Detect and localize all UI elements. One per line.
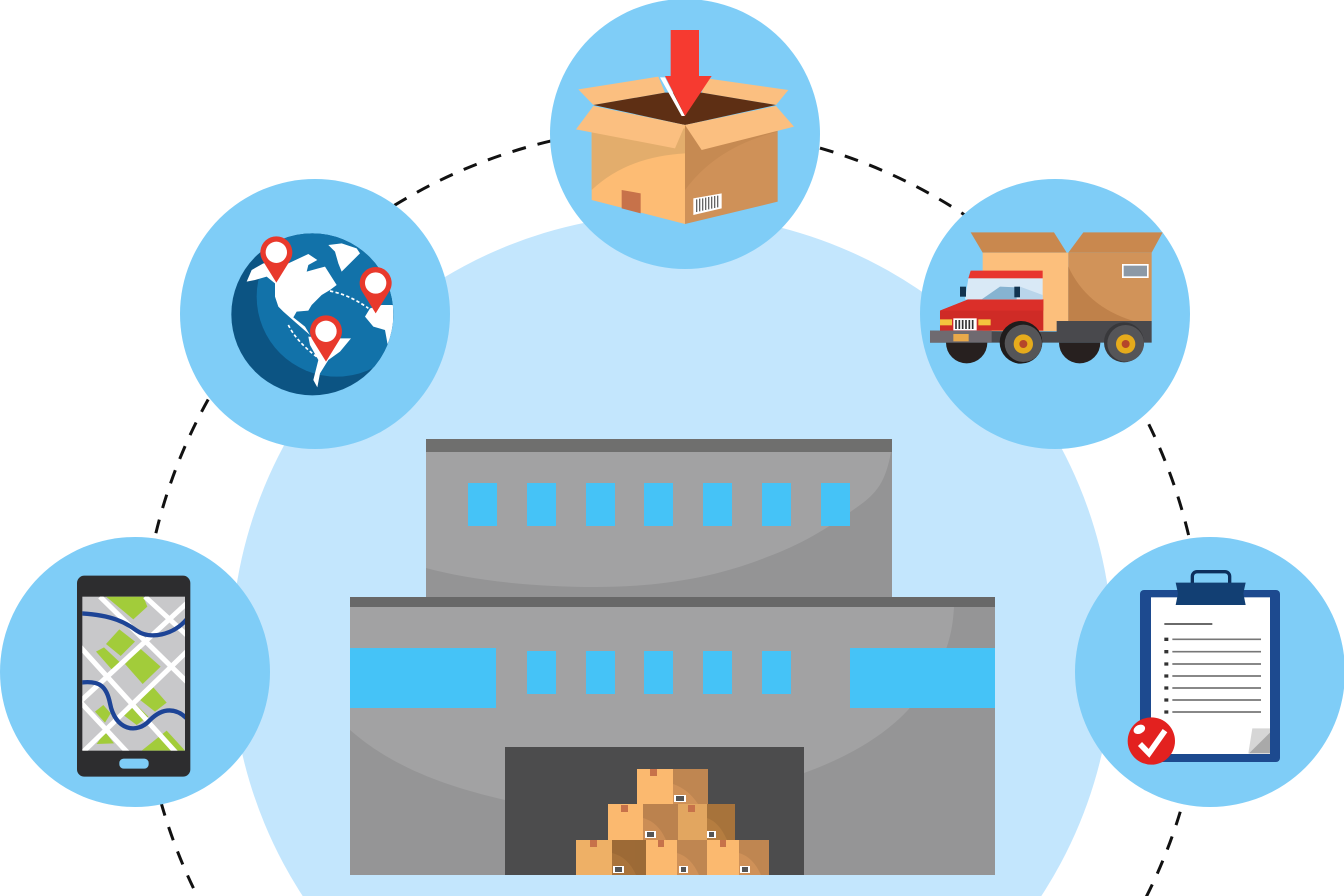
- wheels: [946, 343, 987, 363]
- rivers: [80, 613, 187, 728]
- lower storey: [350, 597, 995, 875]
- node: mobile map tracking: [0, 537, 270, 807]
- dashed cycle path: [141, 127, 1203, 896]
- node: order checklist: [1075, 537, 1344, 807]
- map pins: [260, 236, 392, 362]
- stacked boxes: [576, 769, 769, 875]
- continents: [247, 254, 337, 335]
- icon: open cardboard box with red arrow: [576, 30, 794, 224]
- node: delivery truck: [920, 179, 1190, 449]
- checklist lines: [1164, 624, 1261, 712]
- parks: [95, 597, 185, 751]
- icon: truck carrying cardboard box: [930, 232, 1163, 364]
- background circle: [231, 214, 1113, 896]
- cab: [940, 299, 1043, 331]
- streets: [80, 597, 187, 753]
- icon: globe with map pins: [231, 233, 394, 396]
- icon: smartphone with map: [77, 576, 190, 777]
- loading door: [505, 747, 804, 875]
- warehouse building: [350, 439, 995, 875]
- icon: clipboard with check badge: [1128, 572, 1280, 765]
- lower windows: [350, 648, 995, 708]
- upper windows: [468, 483, 850, 526]
- node: global locations: [180, 179, 450, 449]
- upper storey: [426, 439, 892, 597]
- node: inbound box: [550, 0, 820, 269]
